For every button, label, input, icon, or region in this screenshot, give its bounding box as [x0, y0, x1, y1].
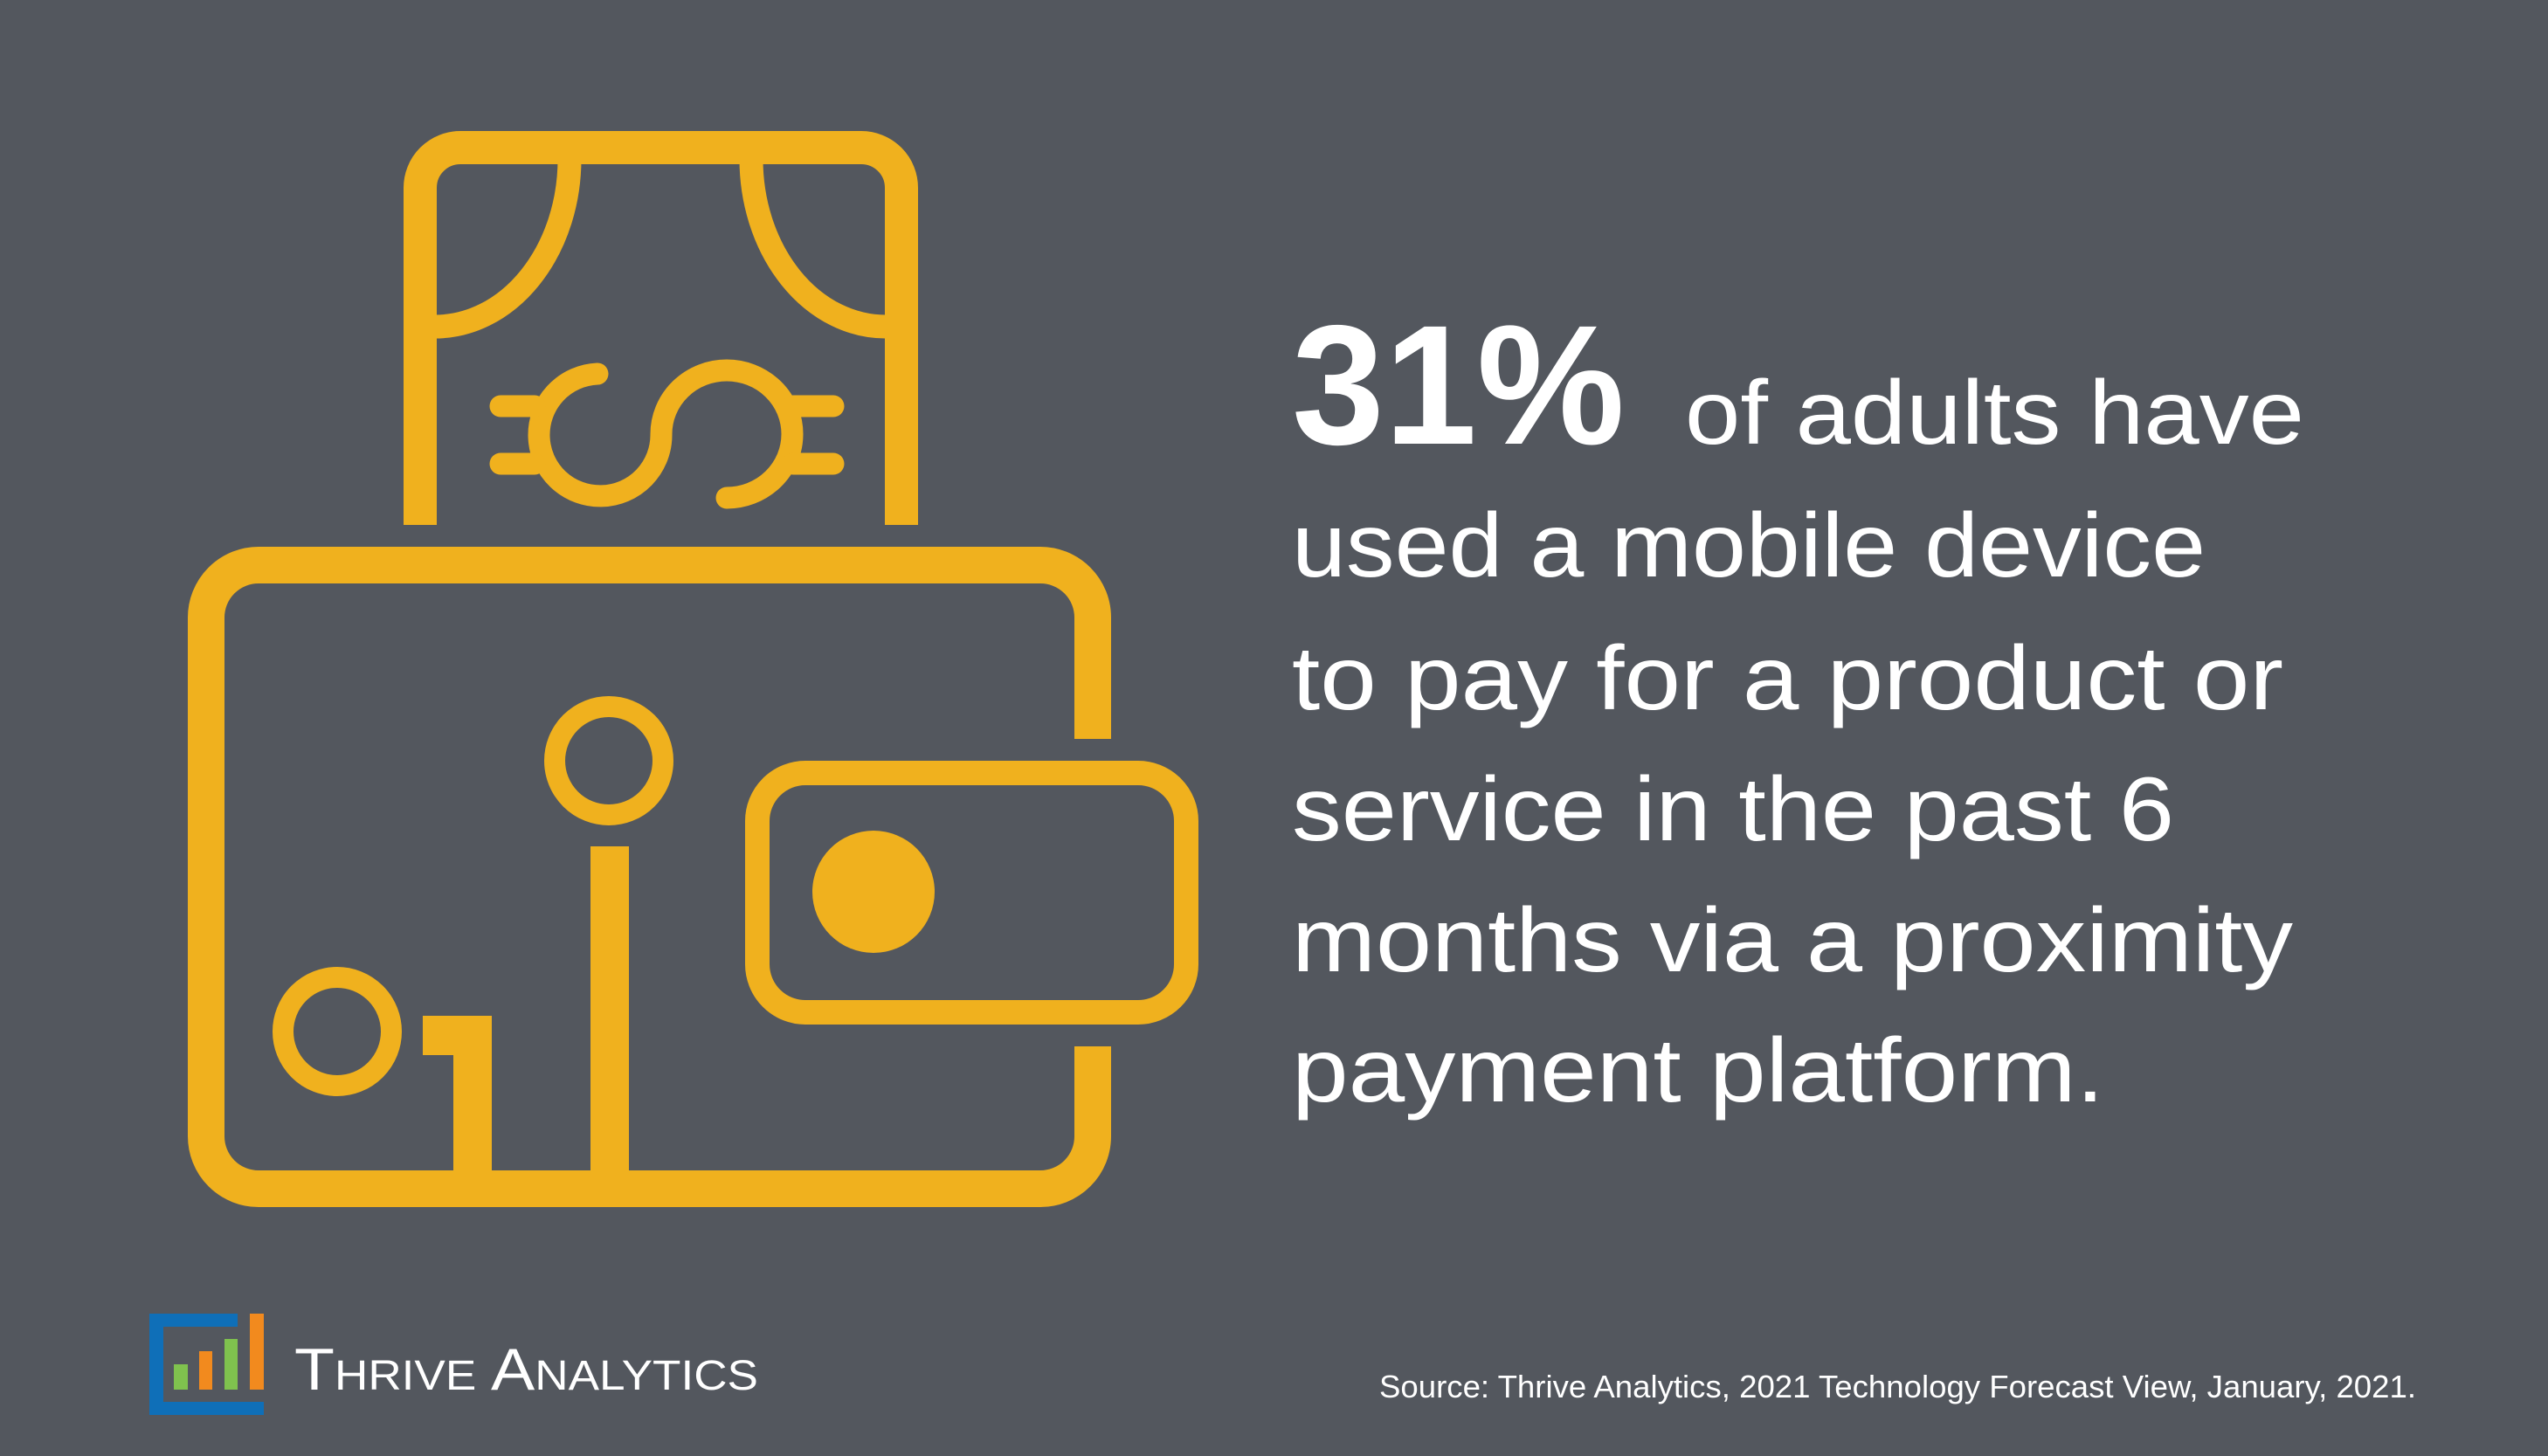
bill: [420, 148, 901, 525]
headline text: 31%: [1292, 290, 1625, 480]
headline text: [1292, 290, 2304, 1121]
logo: [149, 1314, 758, 1415]
headline text: service in the past 6: [1292, 759, 2174, 860]
headline text: months via a proximity: [1292, 890, 2293, 991]
source: Source: Thrive Analytics, 2021 Technology Forecast View, January, 2021.: [1379, 1369, 2416, 1404]
logo: Thrive Analytics: [294, 1336, 758, 1403]
headline text: of adults have: [1685, 362, 2304, 464]
headline text: payment platform.: [1292, 1020, 2104, 1121]
icon: wallet with bill: [206, 148, 1186, 1189]
headline text: used a mobile device: [1292, 495, 2206, 597]
coin circles: [555, 707, 663, 815]
headline text: to pay for a product or: [1292, 628, 2283, 729]
clasp: [757, 773, 1186, 1012]
wallet body: [206, 565, 1093, 1189]
wallet details: [423, 831, 935, 1189]
